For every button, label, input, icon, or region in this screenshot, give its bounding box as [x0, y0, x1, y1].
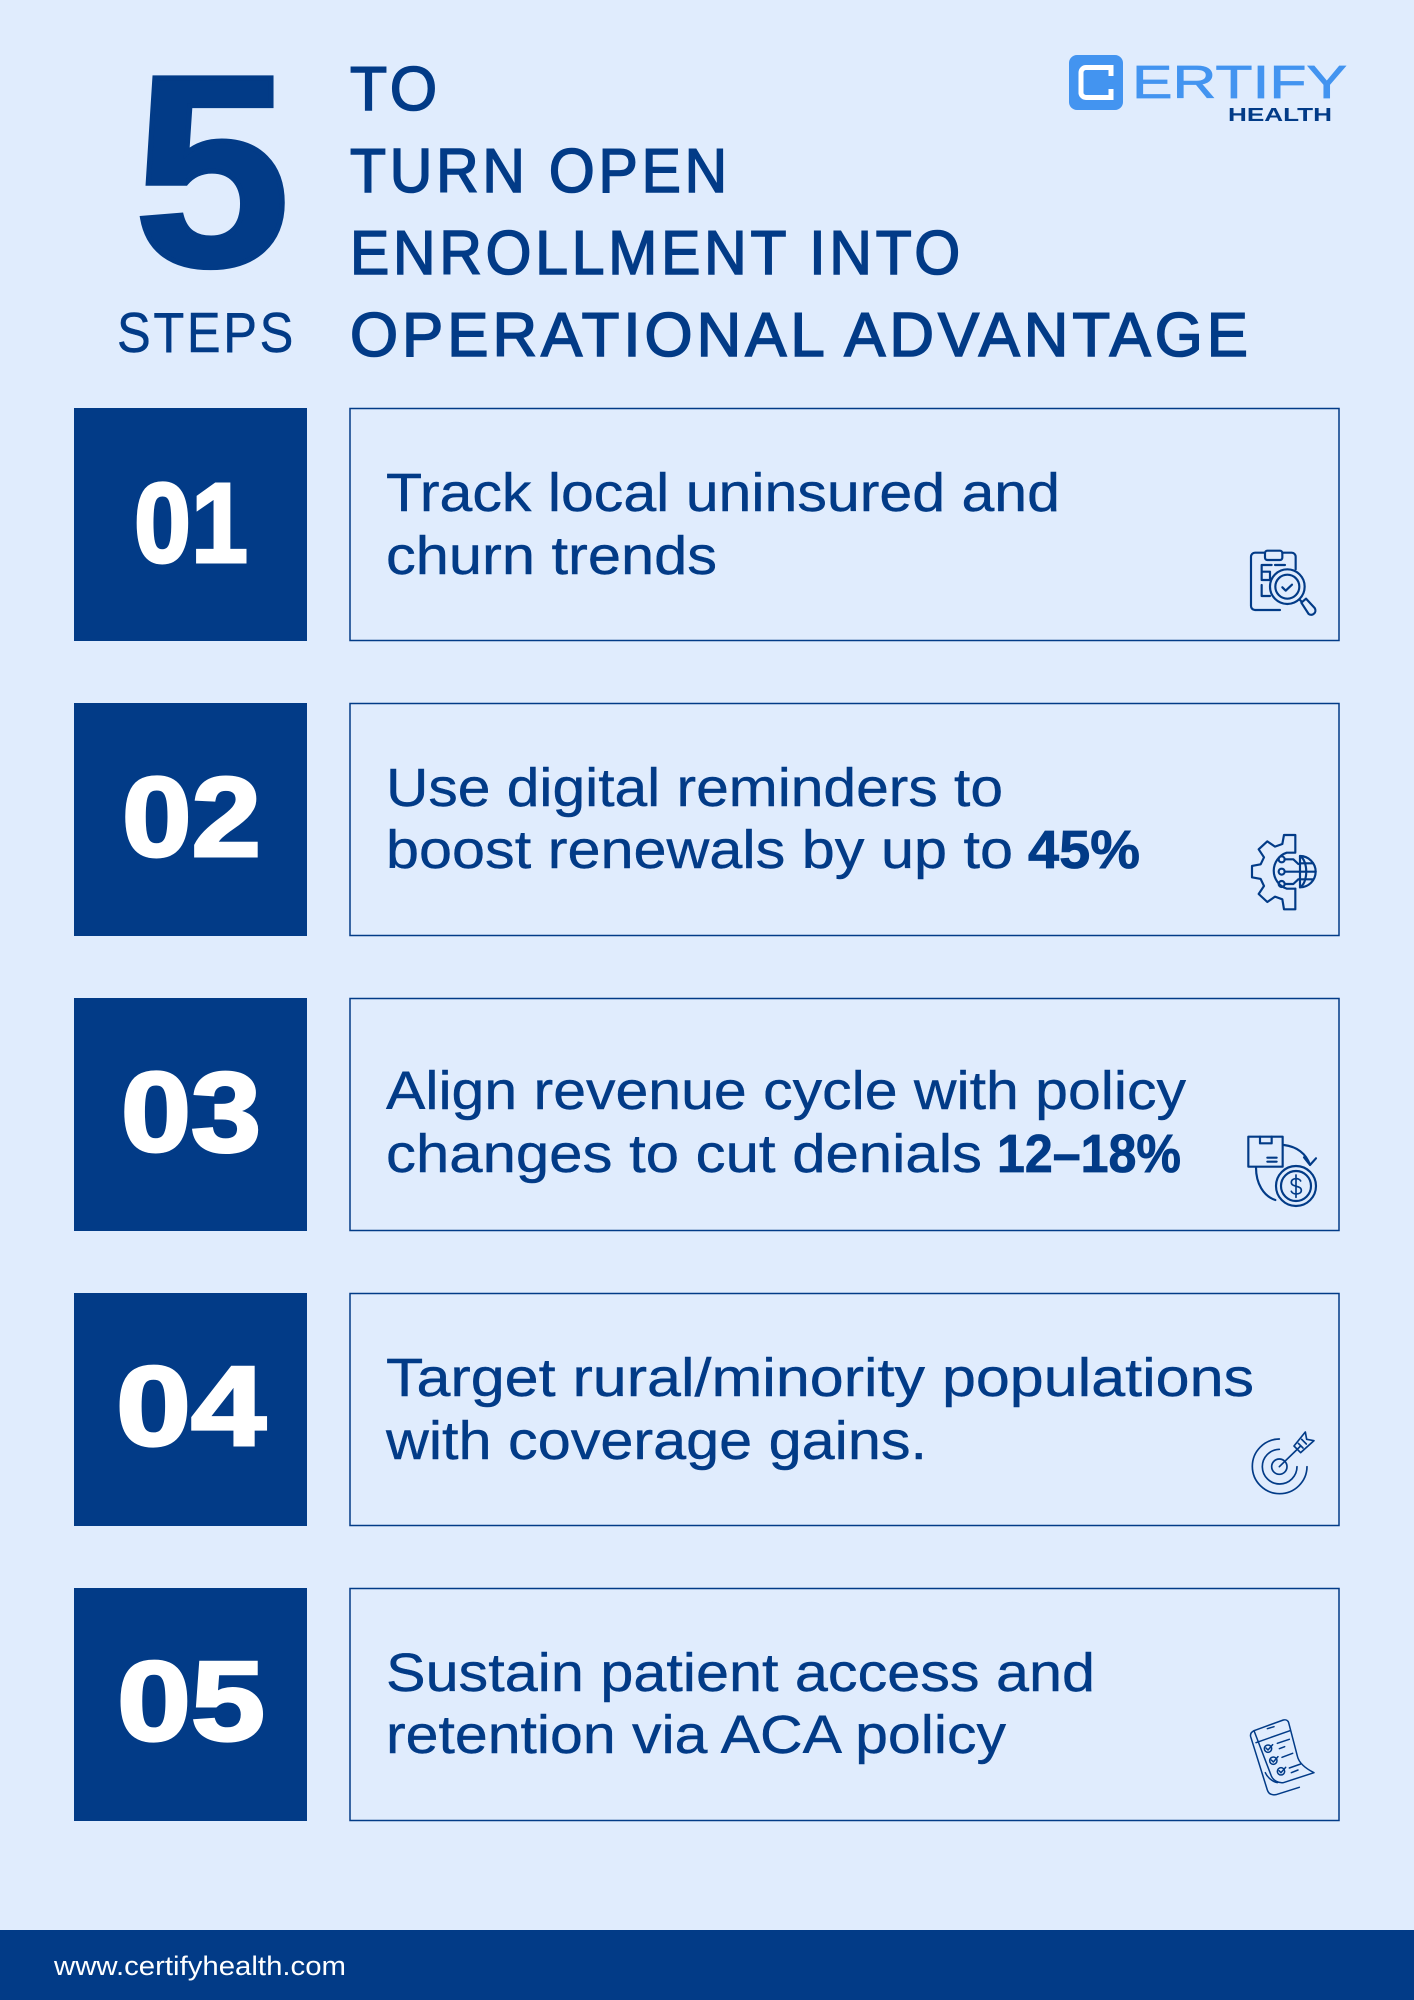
heading: big number 5 steps: 5: [134, 19, 290, 323]
title: TURN OPEN: [350, 137, 731, 206]
text: step 02: 45%: [1028, 820, 1140, 880]
step 03: [74, 998, 1339, 1231]
text: step 02: boost renewals by up to: [386, 820, 1013, 880]
number badge 05: 05: [117, 1638, 265, 1764]
title: TO: [350, 55, 441, 124]
text: step 01: churn trends: [386, 526, 717, 586]
title: OPERATIONAL ADVANTAGE: [350, 301, 1252, 370]
text: step 05: Sustain patient access and: [386, 1643, 1095, 1703]
number badge 05: [74, 1588, 307, 1821]
text: step 03: Align revenue cycle with policy: [386, 1061, 1186, 1121]
number badge 03: [74, 998, 307, 1231]
text: step 05: [386, 1643, 1095, 1765]
number badge 03: 03: [121, 1049, 261, 1175]
title: ENROLLMENT INTO: [350, 219, 964, 288]
text: step 05: retention via ACA policy: [386, 1705, 1006, 1765]
icon: clipboard with magnifier: [1251, 551, 1315, 615]
step 01: [74, 408, 1339, 641]
icon: gear with globe circuit: [1252, 835, 1316, 909]
step 05: [74, 1588, 1339, 1821]
number badge 01: 01: [134, 460, 248, 586]
footer bar: www.certifyhealth.com: [53, 1951, 346, 1981]
text: step 04: Target rural/minority populations: [386, 1348, 1254, 1408]
number badge 02: [74, 703, 307, 936]
heading: big number 5 steps: STEPS: [117, 301, 296, 365]
icon: checklist document: [1250, 1720, 1314, 1795]
text: step 04: [385, 1348, 1254, 1471]
number badge 04: 04: [116, 1343, 266, 1469]
panel: step 04 text box: [350, 1294, 1339, 1526]
number badge 02: 02: [122, 754, 261, 880]
text: step 02: Use digital reminders to: [386, 758, 1003, 818]
text: step 04: with coverage gains.: [385, 1411, 927, 1471]
text: step 01: Track local uninsured and: [386, 463, 1060, 523]
text: step 02: [386, 758, 1140, 880]
step 04: [74, 1293, 1339, 1526]
logo: Certify Health: [1069, 55, 1347, 125]
icon: box and dollar cycle: [1248, 1137, 1316, 1206]
text: step 03: changes to cut denials: [386, 1124, 982, 1184]
icon: target with arrow: [1252, 1432, 1314, 1494]
logo: Certify Health: ERTIFY: [1132, 56, 1347, 108]
title: [350, 55, 1252, 370]
text: step 01: [386, 463, 1060, 586]
number badge 04: [74, 1293, 307, 1526]
footer bar: [0, 1930, 1414, 2000]
panel: step 01 text box: [350, 408, 1339, 640]
step 02: [74, 703, 1339, 936]
panel: step 03 text box: [350, 998, 1339, 1230]
panel: step 05 text box: [350, 1588, 1339, 1820]
number badge 01: [74, 408, 307, 641]
text: step 03: [386, 1061, 1186, 1184]
panel: step 02 text box: [350, 704, 1339, 936]
logo: Certify Health: HEALTH: [1228, 105, 1332, 125]
text: step 03: 12–18%: [997, 1124, 1181, 1184]
